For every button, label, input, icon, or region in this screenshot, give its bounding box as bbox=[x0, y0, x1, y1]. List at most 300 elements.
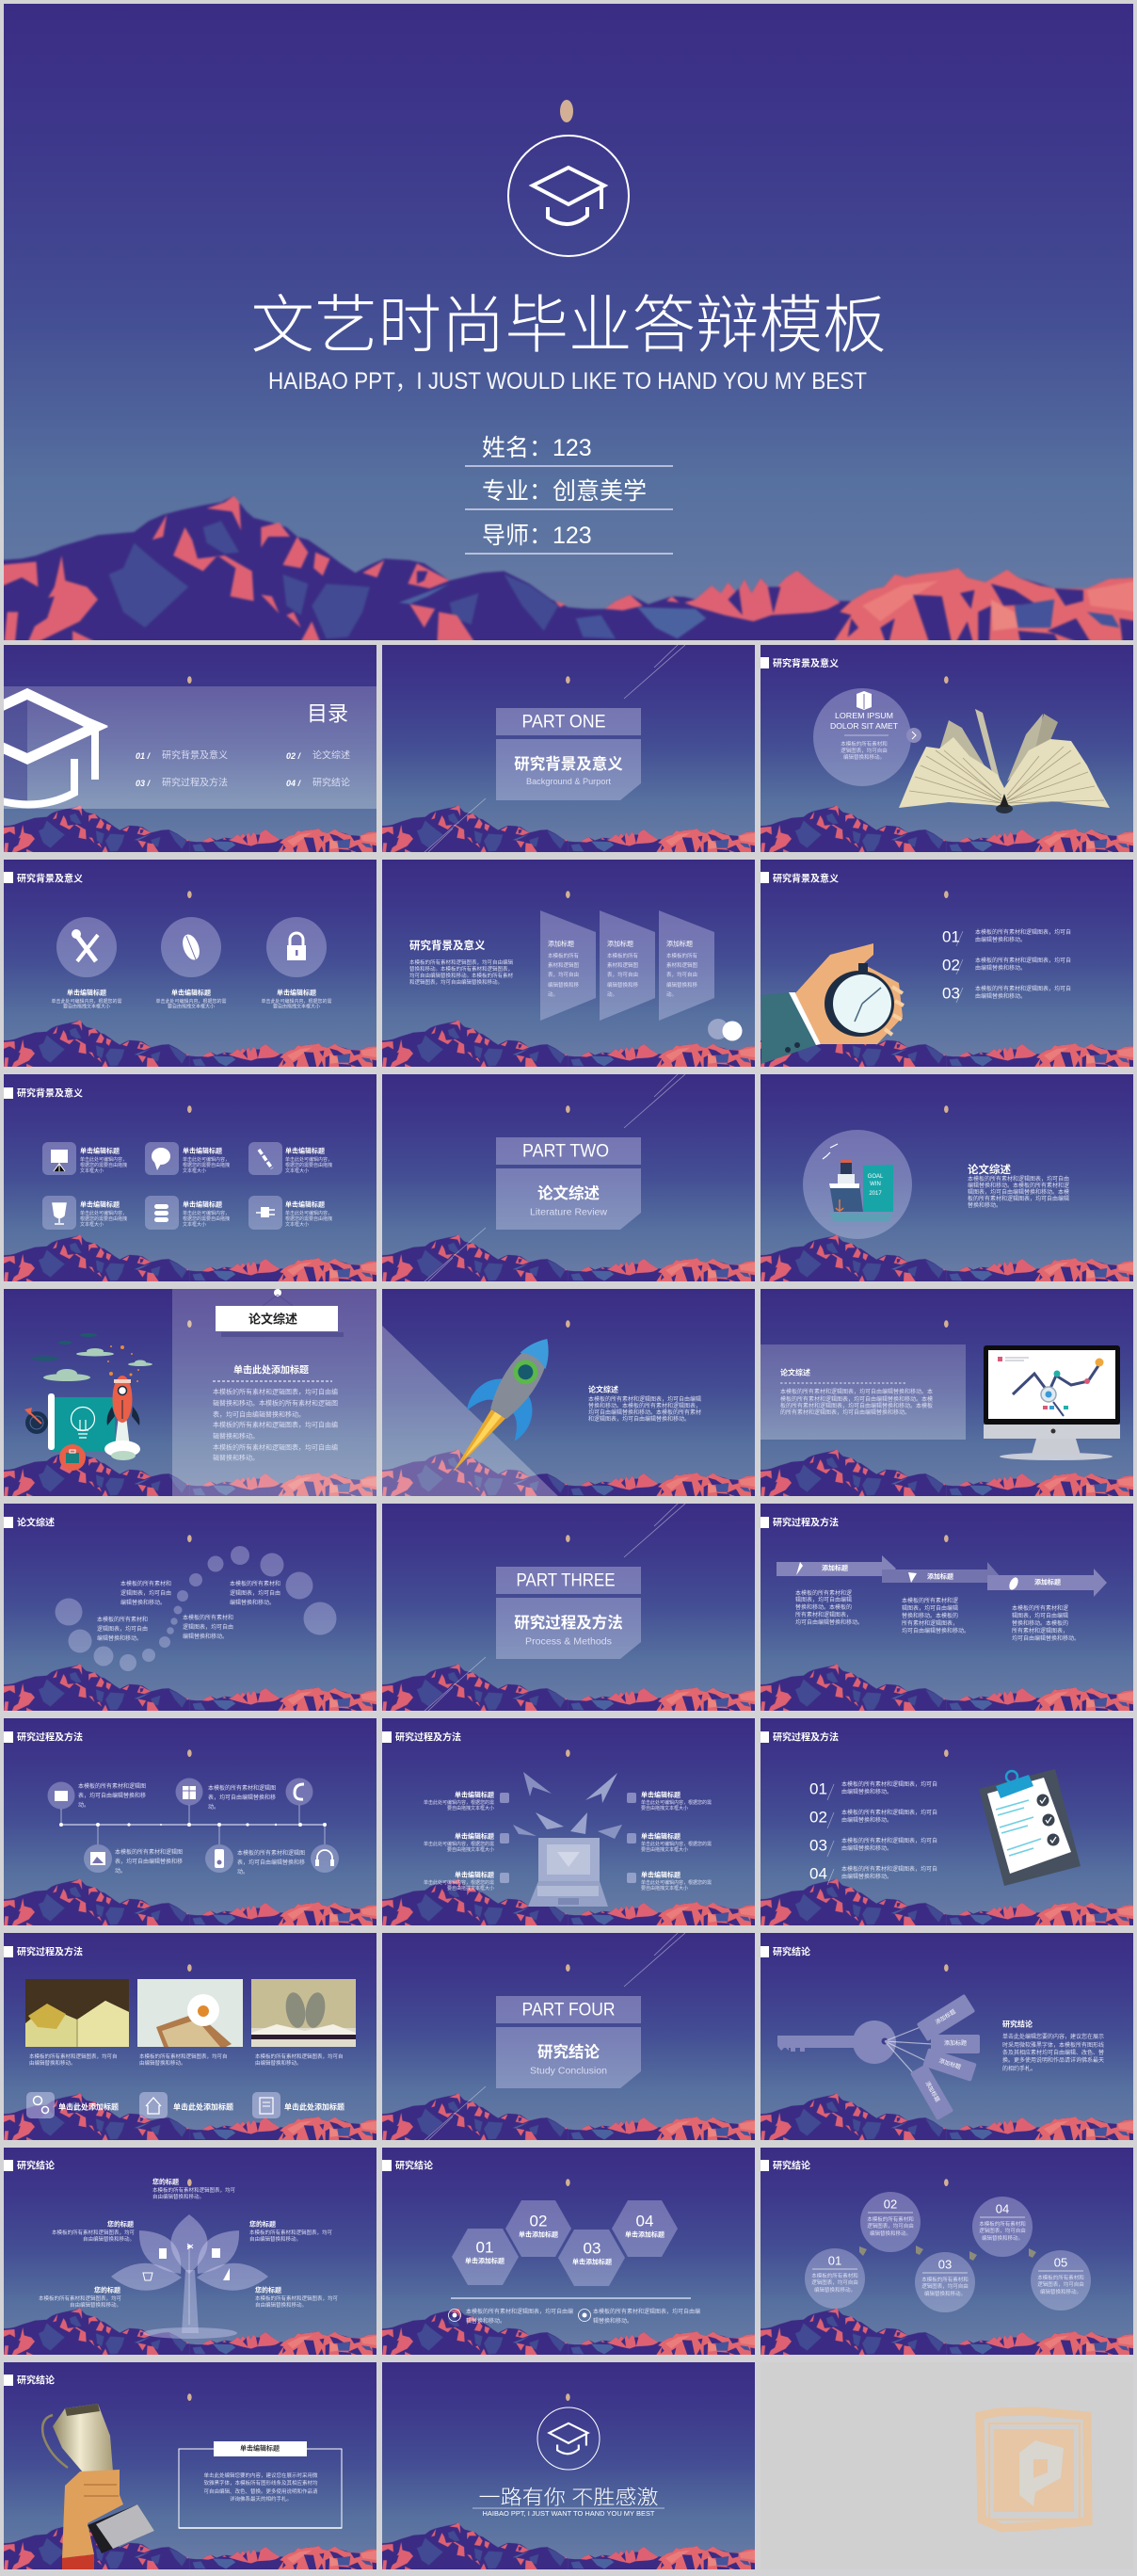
author info: 姓名：123 bbox=[482, 435, 592, 461]
label: upper left: 自由编辑替换和移动。 bbox=[83, 2235, 135, 2243]
spiral of circles bbox=[55, 1546, 337, 1671]
text block: 条及其相应素材均可自由编辑、改色、替 bbox=[1002, 2049, 1104, 2056]
tile: presentation: 文本框大小 bbox=[80, 1167, 104, 1174]
left item 3 bbox=[424, 1870, 509, 1892]
illustration: clipboard bbox=[979, 1769, 1081, 1886]
text block: 本模板的所有素材和逻辑图表，均可自由编辑 bbox=[588, 1395, 701, 1403]
text block: 的相约手札。 bbox=[1002, 2065, 1036, 2072]
heading: 研究结论 bbox=[17, 2160, 55, 2171]
image: open book bbox=[899, 709, 1110, 813]
circle: leaf: 要自由拖拽文本框大小 bbox=[168, 1004, 215, 1009]
tile: trophy bbox=[42, 1196, 127, 1230]
right item 3: 单击此处可编辑内容，根据您的需 bbox=[641, 1879, 712, 1886]
node: gift: 本模板的所有素材和逻辑图 bbox=[208, 1784, 276, 1792]
tile: settings: 单击此处添加标题 bbox=[58, 2101, 119, 2111]
left item 1 bbox=[424, 1791, 509, 1811]
hexagon 02 bbox=[505, 2200, 571, 2257]
circle callout: DOLOR SIT AMET bbox=[830, 721, 898, 731]
part label: PART FOUR bbox=[521, 2000, 616, 2021]
icon: graduation cap in circle bbox=[537, 2407, 600, 2470]
illustration: scroll, bulb and rocket bbox=[24, 1333, 152, 1471]
arrow step 2: 替换和移动。本模板的 bbox=[902, 1612, 958, 1619]
node: music player: 本模板的所有素材和逻辑图 bbox=[237, 1849, 305, 1857]
item 02 bbox=[809, 1808, 937, 1828]
card 1: 动。 bbox=[548, 991, 558, 998]
tile: plug: 文本框大小 bbox=[285, 1221, 309, 1228]
panel: book slide bbox=[760, 645, 1135, 855]
right item 1: 单击此处可编辑内容，根据您的需 bbox=[641, 1799, 712, 1806]
text block: 板的所有素材和逻辑图表，均可自由编辑 bbox=[968, 1195, 1069, 1202]
text block: 替换和移动。 bbox=[968, 1201, 1001, 1209]
tile: home bbox=[139, 2092, 233, 2118]
text block bbox=[588, 1384, 701, 1423]
bubble 05 bbox=[1031, 2250, 1091, 2310]
arrow step 2: 均可自由编辑替换和移动。 bbox=[902, 1627, 969, 1634]
heading: 研究结论 bbox=[17, 2375, 55, 2386]
heading bbox=[382, 2160, 433, 2171]
arrow step 3: 均可自由编辑替换和移动。 bbox=[1012, 1634, 1080, 1642]
tag connectors bbox=[885, 2025, 932, 2076]
item 03: 03 bbox=[809, 1836, 827, 1855]
card 2: 添加标题 bbox=[607, 940, 633, 947]
tag 4: 添加标题 bbox=[923, 2080, 941, 2103]
text block 2: 本模板的所有素材和 bbox=[230, 1580, 280, 1587]
text block 3: 本模板的所有素材和 bbox=[97, 1616, 148, 1623]
hexagon 03: 03 bbox=[584, 2239, 601, 2258]
tile: document: 单击此处添加标题 bbox=[284, 2101, 344, 2111]
contents list: 研究背景及意义 bbox=[162, 749, 228, 761]
text block: 辑图表，均可自由编辑替换和移动。本模 bbox=[968, 1188, 1069, 1196]
tile: home: 单击此处添加标题 bbox=[173, 2101, 233, 2111]
tile: speech bubble bbox=[145, 1142, 230, 1175]
panel: part four section bbox=[381, 1933, 757, 2143]
tile: presentation: 根据您的需要自由拖拽 bbox=[80, 1162, 127, 1168]
card 2: 表，均可自由 bbox=[607, 971, 638, 978]
item 04: 本模板的所有素材和逻辑图表，均可自 bbox=[841, 1865, 937, 1873]
text box: 单击编辑标题 bbox=[240, 2444, 280, 2452]
panel: three photos slide bbox=[3, 1933, 378, 2143]
closing title: 一路有你 不胜感激 bbox=[478, 2487, 659, 2508]
photo captions: 由编辑替换和移动。 bbox=[255, 2059, 302, 2067]
circle: tools: 单击编辑标题 bbox=[67, 989, 106, 996]
item 04 bbox=[809, 1864, 937, 1885]
text block: 表，均可自由编辑替换和移动。 bbox=[213, 1410, 305, 1418]
panel: timeline slide bbox=[3, 1718, 378, 1928]
tag 2: 添加标题 bbox=[944, 2039, 967, 2047]
icon: watermark stamp bbox=[761, 2362, 1133, 2569]
note 2: 本模板的所有素材和逻辑图表，均可自由编 bbox=[593, 2308, 700, 2315]
hanging sign bbox=[216, 1289, 344, 1337]
arrow step 1: 辑图表，均可自由编辑 bbox=[795, 1596, 852, 1603]
panel: dotted spiral slide bbox=[3, 1504, 378, 1714]
bubble 03: 本模板的所有素材和 bbox=[921, 2276, 969, 2283]
text block: 均可自由编辑替换和移动。本模板的所有素材 bbox=[588, 1409, 701, 1416]
tile: document bbox=[252, 2092, 344, 2118]
item 01: 本模板的所有素材和逻辑图表，均可自 bbox=[841, 1780, 937, 1788]
text box: 单击此处编辑您要的内容，建议您在展示时采用微 bbox=[203, 2471, 318, 2479]
text block: 辑替换和移动。本模板的所有素材和逻辑图 bbox=[213, 1399, 338, 1407]
contents list: 研究过程及方法 bbox=[162, 776, 228, 789]
text block: 论文综述 bbox=[968, 1163, 1011, 1176]
heading: 研究过程及方法 bbox=[17, 1945, 83, 1958]
circle: tools: 要自由拖拽文本框大小 bbox=[63, 1004, 110, 1009]
label: top: 本模板的所有素材和逻辑图表，均可 bbox=[152, 2186, 236, 2194]
card 3: 表，均可自由 bbox=[666, 971, 697, 978]
photo captions: 由编辑替换和移动。 bbox=[139, 2059, 186, 2067]
text block 4: 编辑替换和移动。 bbox=[183, 1633, 228, 1640]
card 1: 编辑替换和移 bbox=[548, 981, 580, 989]
right item 3 bbox=[627, 1870, 712, 1892]
photo captions: 本模板的所有素材和逻辑图表，均可自 bbox=[255, 2053, 344, 2060]
note 1 bbox=[448, 2308, 573, 2325]
bubble 02: 本模板的所有素材和 bbox=[867, 2215, 914, 2223]
bubble 05: 05 bbox=[1054, 2256, 1067, 2269]
text block 2 bbox=[230, 1580, 280, 1606]
node: radio: 动。 bbox=[78, 1802, 89, 1809]
left item 2 bbox=[424, 1832, 509, 1853]
hanging sign: 论文综述 bbox=[248, 1312, 297, 1326]
tag 3 bbox=[922, 2048, 977, 2082]
right item 1 bbox=[627, 1791, 712, 1811]
circle: lock: 单击编辑标题 bbox=[277, 989, 316, 996]
bubble 01 bbox=[805, 2248, 865, 2309]
section title: 论文综述 bbox=[537, 1183, 601, 1202]
section subtitle: Process & Methods bbox=[525, 1636, 612, 1648]
heading bbox=[4, 872, 83, 885]
contents list: 03 / bbox=[136, 779, 152, 788]
tag 4 bbox=[910, 2064, 953, 2120]
photo: heart-shaped book pages bbox=[251, 1979, 356, 2047]
tile: settings bbox=[26, 2092, 119, 2118]
panel: part three section bbox=[381, 1504, 757, 1714]
text block 3: 逻辑图表，均可自由 bbox=[97, 1625, 148, 1633]
arrow step 3: 辑图表，均可自由编辑 bbox=[1012, 1612, 1068, 1619]
heading bbox=[4, 2375, 55, 2386]
circle callout: 本模板的所有素材和 bbox=[841, 740, 888, 748]
part label: PART TWO bbox=[522, 1141, 609, 1162]
card 1 bbox=[540, 910, 596, 1021]
connector arrows bbox=[859, 2246, 1036, 2261]
circle callout bbox=[813, 688, 921, 786]
circle: leaf: 单击编辑标题 bbox=[171, 989, 211, 996]
arrow step 2: 所有素材和逻辑图表， bbox=[902, 1619, 958, 1627]
arrow step 3: 添加标题 bbox=[1034, 1578, 1061, 1586]
panel: monitor slide bbox=[760, 1289, 1135, 1499]
card 1: 本模板的所有 bbox=[548, 952, 580, 959]
label: lower left: 您的标题 bbox=[94, 2286, 120, 2294]
item 03 bbox=[942, 985, 1071, 1003]
circle: tools bbox=[51, 917, 122, 1009]
tile: database bbox=[145, 1196, 230, 1230]
bubble 01: 01 bbox=[828, 2254, 841, 2267]
section subtitle: Literature Review bbox=[530, 1207, 608, 1218]
bubble 04: 04 bbox=[996, 2201, 1009, 2216]
bubble 03: 03 bbox=[938, 2258, 952, 2271]
note 2 bbox=[578, 2308, 700, 2325]
bubble 03: 逻辑图表，均可自由 bbox=[921, 2282, 969, 2290]
circle: leaf: 单击此处可编辑内容，根据您的需 bbox=[155, 998, 227, 1005]
heading: 研究结论 bbox=[773, 2160, 810, 2171]
label: lower right bbox=[255, 2286, 339, 2309]
light triangle bbox=[382, 1326, 558, 1496]
hexagon 03: 单击添加标题 bbox=[572, 2258, 612, 2265]
tile: speech bubble: 文本框大小 bbox=[183, 1167, 206, 1174]
circle with ship illustration bbox=[803, 1130, 912, 1239]
text block: 和逻辑图表，均可自由编辑替换和移动。 bbox=[588, 1415, 690, 1423]
left item 1: 单击此处可编辑内容，根据您的需 bbox=[424, 1799, 494, 1806]
bubble 02: 编辑替换和移动。 bbox=[870, 2230, 911, 2237]
text block: 研究结论 bbox=[1002, 2019, 1033, 2028]
node: music player bbox=[205, 1844, 305, 1876]
item 01: 由编辑替换和移动。 bbox=[841, 1788, 892, 1795]
panel: contents slide bbox=[0, 645, 378, 855]
right item 2: 要自由拖拽文本框大小 bbox=[641, 1846, 688, 1853]
arrow step 1: 均可自由编辑替换和移动。 bbox=[795, 1618, 863, 1626]
text block 1: 本模板的所有素材和 bbox=[120, 1580, 171, 1587]
heading: 研究结论 bbox=[395, 2160, 433, 2171]
photo captions: 由编辑替换和移动。 bbox=[29, 2059, 76, 2067]
contents list: 01 / bbox=[136, 751, 152, 761]
left item 3: 要自由拖拽文本框大小 bbox=[447, 1885, 494, 1892]
hexagon 03 bbox=[558, 2230, 625, 2286]
card 3 bbox=[659, 910, 714, 1021]
bubble 04 bbox=[972, 2197, 1033, 2257]
text block: 单击此处编辑您要的内容，建议您在展示 bbox=[1002, 2033, 1104, 2040]
bubble 01: 本模板的所有素材和 bbox=[811, 2272, 858, 2279]
tag 3: 添加标题 bbox=[938, 2057, 962, 2071]
text box: 可自由编辑、改色、替换。更多使用说明和作品请 bbox=[203, 2487, 318, 2495]
divider bbox=[472, 2507, 665, 2509]
bubble 05: 编辑替换和移动。 bbox=[1040, 2288, 1081, 2295]
text block: 单击此处添加标题 bbox=[233, 1363, 309, 1377]
node: headphones bbox=[311, 1844, 339, 1873]
bubble 04: 编辑替换和移动。 bbox=[982, 2234, 1023, 2242]
divider bbox=[451, 2297, 691, 2299]
label: lower left: 本模板的所有素材和逻辑图表，均可 bbox=[39, 2294, 121, 2302]
tile: link: 单击编辑标题 bbox=[285, 1147, 325, 1154]
icon: large graduation cap bbox=[0, 694, 108, 804]
heading: 研究过程及方法 bbox=[773, 1516, 839, 1529]
item 01: 01 bbox=[942, 928, 960, 945]
arrow step 1 bbox=[777, 1555, 896, 1626]
text panel: 本模板的所有素材和逻辑图表，均可自由编辑替换和移动。本 bbox=[780, 1388, 933, 1395]
panel: part one section bbox=[381, 645, 757, 855]
circle: lock: 要自由拖拽文本框大小 bbox=[273, 1004, 320, 1009]
text block 1 bbox=[120, 1580, 171, 1606]
heading bbox=[761, 2160, 810, 2171]
tile: link: 根据您的需要自由拖拽 bbox=[285, 1162, 332, 1168]
part label: PART THREE bbox=[516, 1570, 616, 1591]
note 2: 辑替换和移动。 bbox=[593, 2317, 633, 2325]
tile: plug: 单击此处可编辑内容， bbox=[285, 1210, 332, 1216]
heading: contents: 目录 bbox=[307, 702, 348, 725]
tag 2 bbox=[931, 2035, 980, 2053]
panel: key and tags slide bbox=[760, 1933, 1135, 2143]
text panel bbox=[761, 1344, 966, 1440]
tile: presentation: 单击此处可编辑内容， bbox=[80, 1156, 127, 1163]
label: upper left: 您的标题 bbox=[107, 2220, 134, 2228]
node: picture bbox=[84, 1844, 183, 1875]
text block: 均可自由编辑替换和移动。本模板的所有素材 bbox=[409, 972, 514, 979]
circle: lock: 单击此处可编辑内容，根据您的需 bbox=[261, 998, 332, 1005]
panel: clipboard slide bbox=[760, 1718, 1135, 1928]
timeline axis bbox=[59, 1805, 327, 1844]
heading bbox=[4, 2160, 55, 2171]
node: picture: 动。 bbox=[115, 1868, 126, 1875]
arrow step 1: 所有素材和逻辑图表， bbox=[795, 1611, 852, 1618]
arrow step 2: 添加标题 bbox=[927, 1572, 953, 1580]
card 2: 素材和逻辑图 bbox=[607, 961, 639, 969]
hexagon 02: 单击添加标题 bbox=[519, 2230, 558, 2239]
photo: open book with crumpled page bbox=[25, 1979, 129, 2047]
text block 4: 逻辑图表，均可自由 bbox=[183, 1623, 233, 1631]
arrow step 2: 本模板的所有素材和逻 bbox=[902, 1597, 958, 1604]
item 02: 本模板的所有素材和逻辑图表，均可自 bbox=[975, 957, 1071, 964]
node: picture: 表，均可自由编辑替换和移 bbox=[115, 1858, 183, 1865]
right item 2: 单击此处可编辑内容，根据您的需 bbox=[641, 1841, 712, 1847]
label: lower right: 您的标题 bbox=[255, 2286, 281, 2294]
image: hand holding trophy bbox=[42, 2404, 154, 2569]
tile: presentation bbox=[42, 1142, 127, 1175]
label: top: 自由编辑替换和移动。 bbox=[152, 2193, 204, 2200]
card 2: 编辑替换和移 bbox=[607, 981, 639, 989]
bubble 05: 本模板的所有素材和 bbox=[1037, 2274, 1084, 2281]
image: hand with stopwatch bbox=[761, 943, 904, 1064]
node: radio: 表，均可自由编辑替换和移 bbox=[78, 1792, 146, 1799]
side panel bbox=[172, 1289, 376, 1496]
subtitle: HAIBAO PPT，I JUST WOULD LIKE TO HAND YOU MY BEST bbox=[268, 368, 867, 394]
contents list: 研究结论 bbox=[312, 776, 350, 789]
label: lower left: 自由编辑替换和移动。 bbox=[70, 2301, 121, 2309]
panel: five bubbles slide bbox=[760, 2148, 1135, 2358]
label: top: 您的标题 bbox=[152, 2177, 179, 2186]
circle with ship illustration: WIN bbox=[870, 1182, 881, 1187]
section title: 研究背景及意义 bbox=[514, 754, 623, 773]
item 02: 02 bbox=[942, 957, 960, 974]
label: upper right: 本模板的所有素材和逻辑图表，均可 bbox=[249, 2229, 333, 2236]
circle: lock bbox=[261, 917, 332, 1009]
panel: flying rocket slide bbox=[381, 1289, 757, 1499]
circle: leaf bbox=[155, 917, 227, 1009]
panel: trophy slide bbox=[3, 2362, 378, 2572]
bubble 02: 02 bbox=[884, 2198, 897, 2211]
photo captions: 本模板的所有素材和逻辑图表，均可自 bbox=[139, 2053, 228, 2060]
panel: paper planes and laptop slide bbox=[381, 1718, 757, 1928]
tile: database: 单击此处可编辑内容， bbox=[183, 1210, 230, 1216]
tile: plug: 单击编辑标题 bbox=[285, 1199, 325, 1209]
label: lower right: 本模板的所有素材和逻辑图表，均可 bbox=[255, 2294, 339, 2302]
tile: link: 文本框大小 bbox=[285, 1167, 309, 1174]
hexagon 04: 04 bbox=[636, 2213, 653, 2230]
tile: speech bubble: 根据您的需要自由拖拽 bbox=[183, 1162, 230, 1168]
text block: 论文综述 bbox=[588, 1384, 618, 1393]
heading bbox=[4, 1516, 55, 1529]
bubble 02 bbox=[860, 2192, 921, 2252]
arrow step 3 bbox=[987, 1569, 1107, 1642]
panel: six tiles slide bbox=[3, 1074, 378, 1284]
section subtitle: Study Conclusion bbox=[530, 2066, 607, 2077]
label: upper right bbox=[249, 2220, 333, 2243]
item 02: 本模板的所有素材和逻辑图表，均可自 bbox=[841, 1809, 937, 1816]
text block: 换。更多使用说明和作品请详询佛系最天 bbox=[1002, 2056, 1104, 2064]
author info bbox=[465, 435, 673, 554]
contents list bbox=[136, 749, 350, 789]
bubble 04: 逻辑图表，均可自由 bbox=[979, 2227, 1026, 2234]
hexagon 02: 02 bbox=[530, 2213, 547, 2230]
node: gift bbox=[175, 1778, 276, 1811]
text block: 本模板的所有素材和逻辑图表，均可自由 bbox=[968, 1175, 1069, 1183]
contents list: 04 / bbox=[286, 779, 302, 788]
circle: tools: 单击此处可编辑内容，根据您的需 bbox=[51, 998, 122, 1005]
item 02: 由编辑替换和移动。 bbox=[975, 964, 1026, 972]
illustration: planes and laptop bbox=[513, 1772, 622, 1907]
text block bbox=[213, 1363, 338, 1461]
bubble 03 bbox=[915, 2252, 975, 2312]
heading: 研究背景及意义 bbox=[17, 1087, 83, 1100]
item 03: 本模板的所有素材和逻辑图表，均可自 bbox=[841, 1837, 937, 1844]
circle with ship illustration: 2017 bbox=[869, 1191, 882, 1197]
section card bbox=[424, 1504, 685, 1711]
node: music player: 动。 bbox=[237, 1869, 248, 1876]
arrow step 2 bbox=[882, 1562, 1001, 1634]
card 3: 编辑替换和移 bbox=[666, 981, 698, 989]
photo captions: 本模板的所有素材和逻辑图表，均可自 bbox=[29, 2053, 118, 2060]
tile: trophy: 文本框大小 bbox=[80, 1221, 104, 1228]
arrow step 2: 辑图表，均可自由编辑 bbox=[902, 1604, 958, 1612]
item 02 bbox=[942, 957, 1071, 974]
text block bbox=[409, 939, 514, 986]
text block 2: 编辑替换和移动。 bbox=[230, 1599, 275, 1606]
panel: part two section bbox=[381, 1074, 757, 1284]
author info: 专业：创意美学 bbox=[482, 478, 647, 505]
card 2 bbox=[600, 910, 655, 1021]
text block: 本模板的所有素材和逻辑图表，均可自由编 bbox=[213, 1442, 338, 1452]
circle callout: 编辑替换和移动。 bbox=[843, 753, 885, 761]
image: desktop monitor with chart bbox=[984, 1345, 1120, 1460]
panel: closing slide bbox=[381, 2362, 757, 2572]
bubble 02: 逻辑图表，均可自由 bbox=[867, 2222, 914, 2230]
hexagon 04: 单击添加标题 bbox=[625, 2230, 665, 2239]
contents list: 论文综述 bbox=[312, 749, 350, 761]
item 03 bbox=[809, 1836, 937, 1857]
hexagon 01: 01 bbox=[476, 2239, 493, 2256]
contents band bbox=[4, 686, 376, 809]
tag 1 bbox=[917, 1994, 975, 2041]
card 3: 动。 bbox=[666, 991, 677, 998]
text block: 替换和移动。本模板的所有素材和逻辑图表， bbox=[409, 965, 513, 973]
item 02: 02 bbox=[809, 1808, 827, 1827]
card 1: 素材和逻辑图 bbox=[548, 961, 580, 969]
bubble 05: 逻辑图表，均可自由 bbox=[1037, 2280, 1084, 2288]
section card bbox=[424, 1074, 685, 1281]
text block bbox=[1002, 2019, 1104, 2072]
tile: database: 单击编辑标题 bbox=[183, 1199, 222, 1209]
text block 3: 编辑替换和移动。 bbox=[97, 1634, 142, 1642]
text block: 本模板的所有素材和逻辑图表，均可自由编 bbox=[213, 1388, 338, 1395]
item 01: 本模板的所有素材和逻辑图表，均可自 bbox=[975, 928, 1071, 936]
text block 3 bbox=[97, 1616, 148, 1642]
heading: 研究结论 bbox=[773, 1945, 810, 1958]
card 2: 动。 bbox=[607, 991, 617, 998]
icon: key bbox=[777, 2021, 896, 2064]
panel: tree diagram slide bbox=[3, 2148, 378, 2358]
tile: plug bbox=[248, 1196, 332, 1230]
arrow step 1: 添加标题 bbox=[822, 1563, 848, 1572]
item 01 bbox=[942, 928, 1071, 946]
tile: plug: 根据您的需要自由拖拽 bbox=[285, 1216, 332, 1222]
node: radio: 本模板的所有素材和逻辑图 bbox=[78, 1782, 146, 1790]
item 01: 01 bbox=[809, 1779, 827, 1798]
